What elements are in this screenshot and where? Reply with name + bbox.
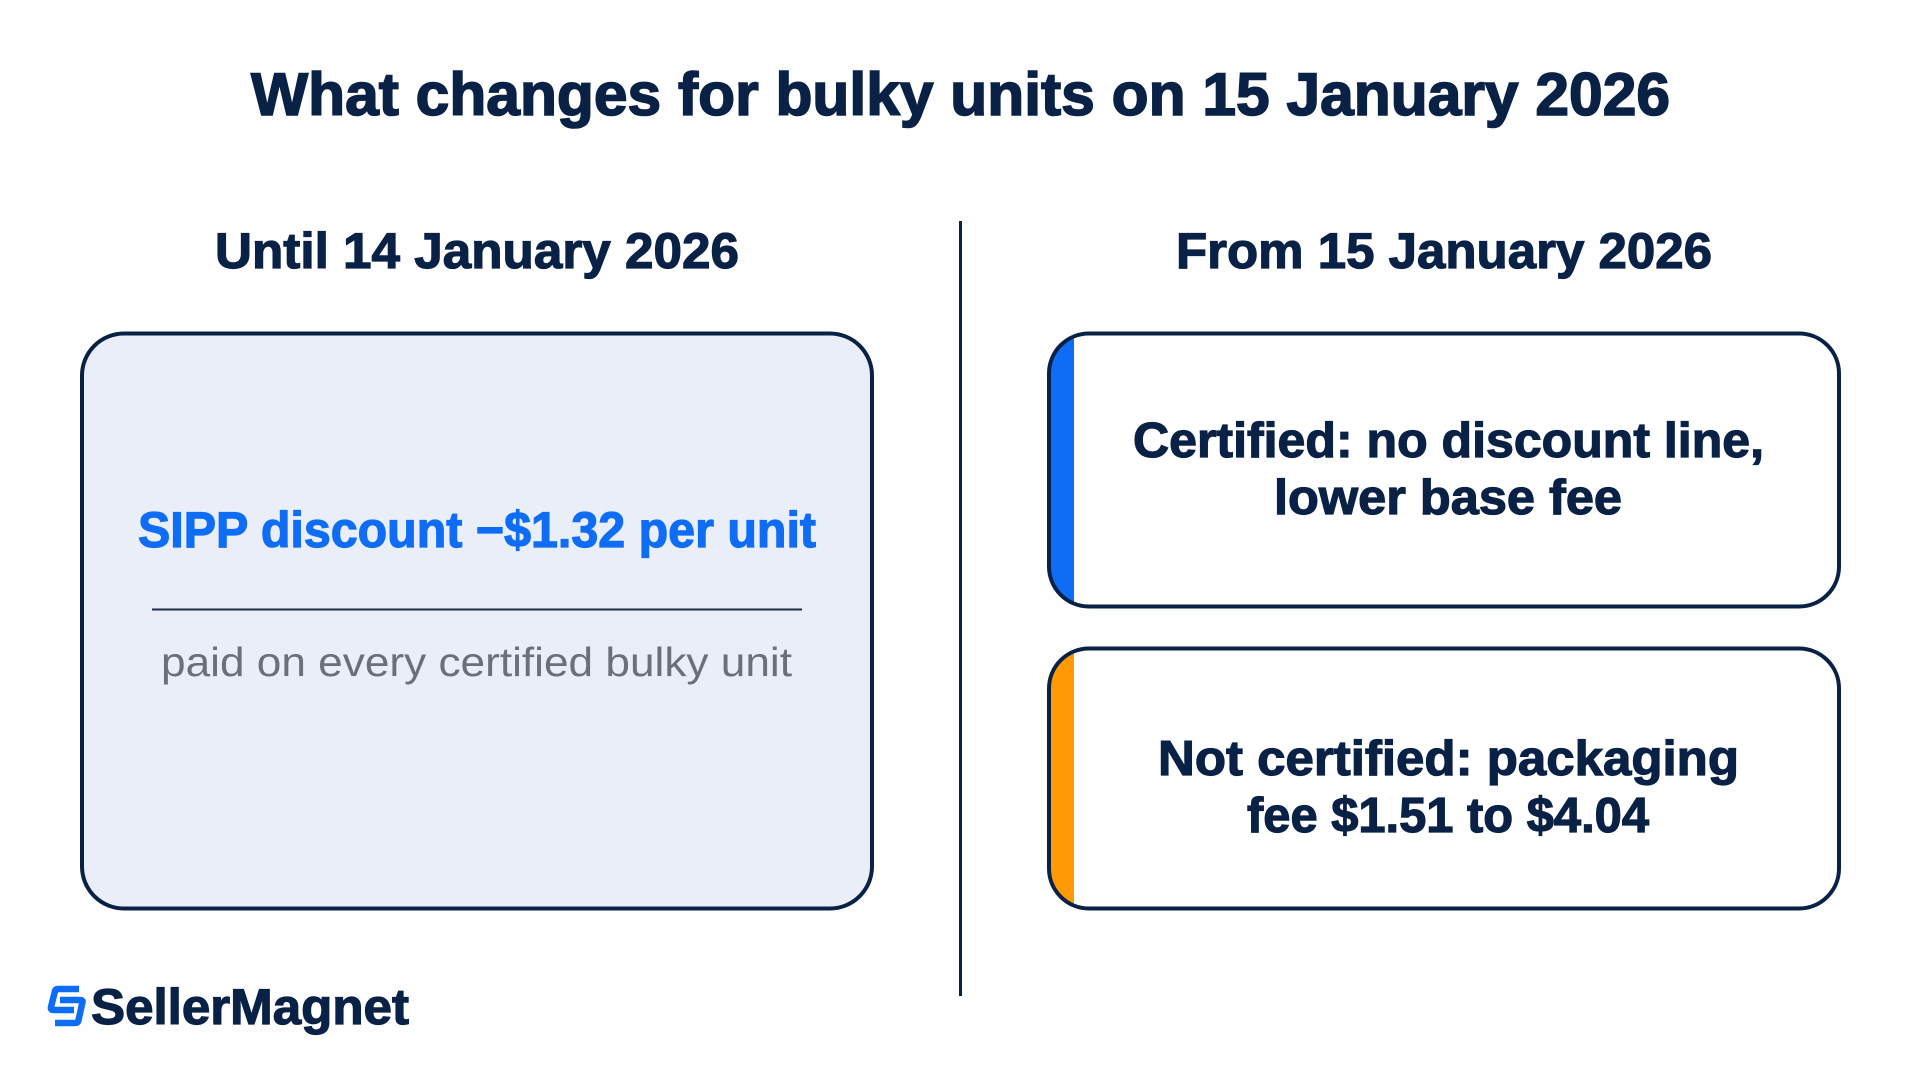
heading: until 14 January 2026: Until 14 January 2026 — [215, 223, 739, 279]
title: What changes for bulky units on 15 January 2026 — [251, 61, 1670, 128]
logo: SellerMagnet — [51, 979, 409, 1035]
certified text — [1133, 414, 1764, 525]
panel: certified — [1049, 333, 1839, 607]
certified text: Certified: no discount line, — [1133, 414, 1764, 468]
subtext: paid on every certified bulky unit — [161, 639, 793, 685]
thin rule — [152, 608, 802, 610]
SIPP discount headline: SIPP discount −$1.32 per unit — [138, 502, 816, 558]
wordmark: SellerMagnet — [91, 979, 409, 1035]
panel: until 14 January — [82, 334, 872, 908]
icon: magnet S — [51, 989, 83, 1023]
vertical divider — [959, 221, 962, 996]
orange accent bar — [1051, 653, 1074, 904]
not certified text — [1158, 732, 1739, 843]
blue accent bar — [1051, 338, 1074, 602]
not certified text: Not certified: packaging — [1158, 732, 1739, 786]
not certified text: fee $1.51 to $4.04 — [1247, 789, 1649, 843]
heading: from 15 January 2026: From 15 January 2026 — [1176, 223, 1712, 279]
certified text: lower base fee — [1274, 471, 1622, 525]
panel: not certified — [1049, 648, 1839, 909]
